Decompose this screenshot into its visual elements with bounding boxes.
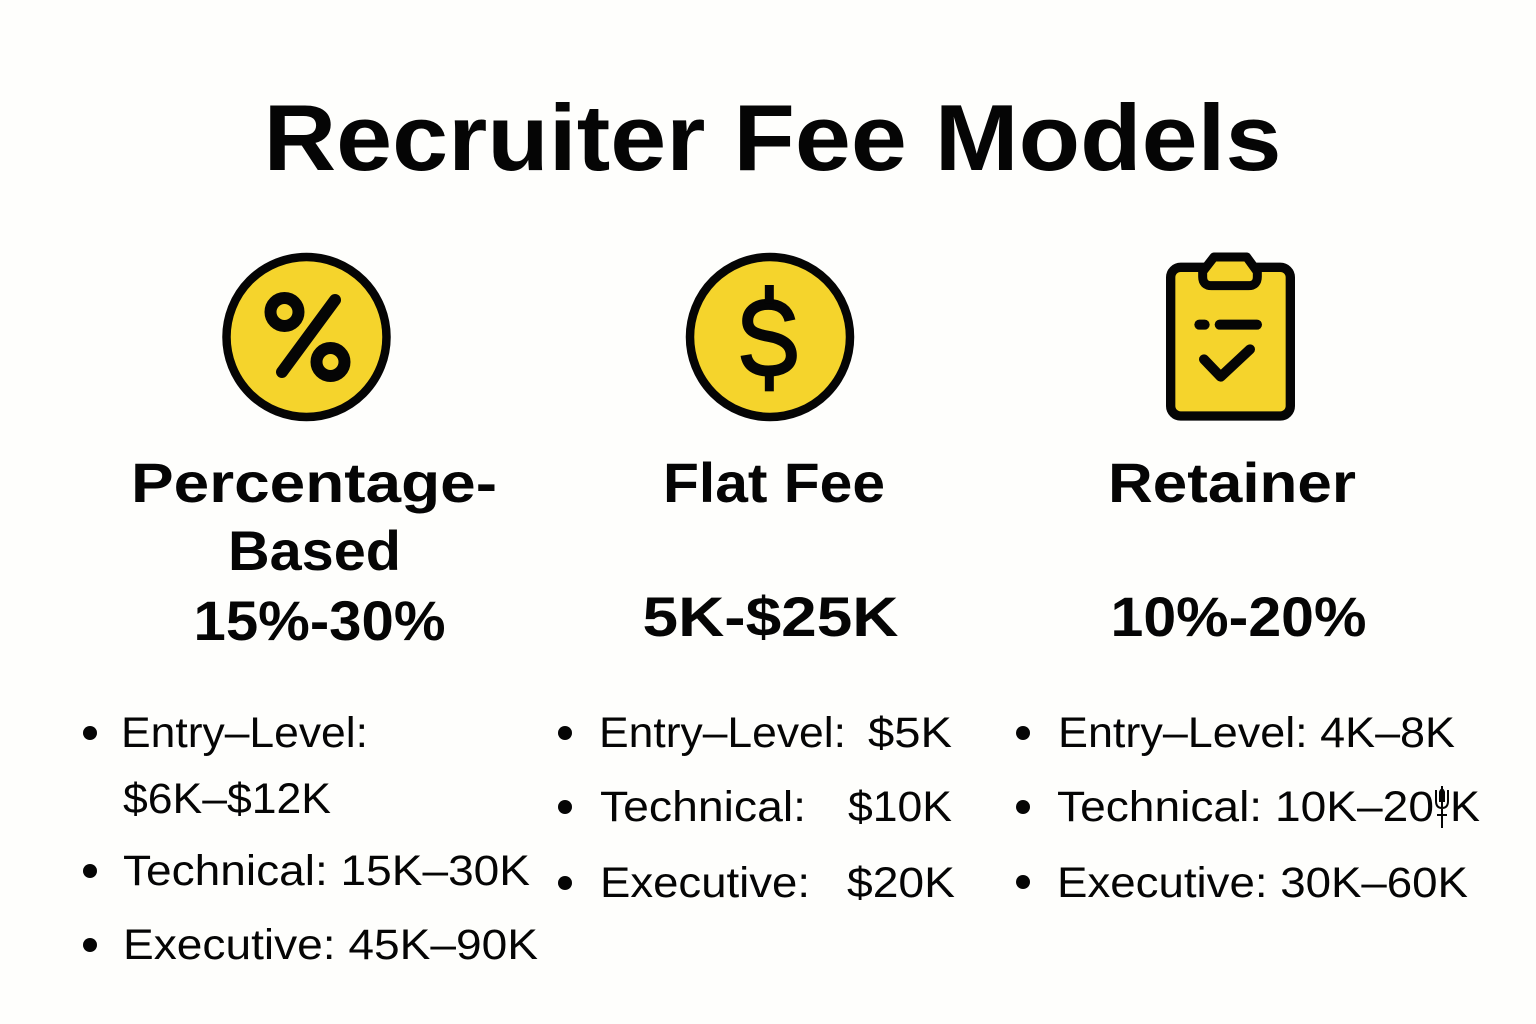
heading: percentage-based	[131, 451, 497, 582]
icon: dollar coin	[690, 257, 850, 417]
list: retainer fees	[1016, 709, 1480, 907]
heading: percentage-based: Based	[228, 519, 401, 582]
list: flat fees: Entry–Level:	[599, 709, 846, 757]
list: retainer fees: Technical: 10K–20	[1057, 783, 1434, 831]
icon: clipboard	[1171, 257, 1290, 416]
list: retainer fees: K	[1450, 783, 1480, 831]
heading: flat fee: Flat Fee	[663, 451, 885, 514]
icon: percent coin	[226, 257, 386, 417]
list: flat fees: Executive:	[600, 859, 810, 907]
heading: retainer: Retainer	[1108, 451, 1356, 514]
panel: retainer	[1016, 257, 1480, 907]
list: percentage-based fees: Entry–Level:	[121, 709, 368, 757]
panel: percentage-based	[83, 257, 538, 969]
list: percentage-based fees	[83, 709, 538, 969]
list: flat fees: $20K	[847, 859, 955, 907]
list: flat fees: Technical:	[600, 783, 806, 831]
panel: flat fee	[558, 257, 955, 907]
list: flat fees: $10K	[848, 783, 952, 831]
list: retainer fees: Executive: 30K–60K	[1057, 859, 1468, 907]
title: Recruiter Fee Models	[264, 85, 1282, 190]
heading: percentage-based: Percentage-	[131, 451, 497, 514]
fee range: 15%-30%: 15%-30%	[194, 589, 446, 652]
list: percentage-based fees: Technical: 15K–30K	[123, 847, 530, 895]
fee range: 5K-$25K: 5K-$25K	[642, 585, 898, 648]
list: flat fees: $5K	[868, 709, 952, 757]
list: percentage-based fees: $6K–$12K	[123, 775, 331, 823]
list: percentage-based fees: Executive: 45K–90K	[123, 921, 538, 969]
list: retainer fees: Entry–Level: 4K–8K	[1058, 709, 1455, 757]
list: flat fees	[558, 709, 955, 907]
fee range: 10%-20%: 10%-20%	[1110, 585, 1366, 648]
